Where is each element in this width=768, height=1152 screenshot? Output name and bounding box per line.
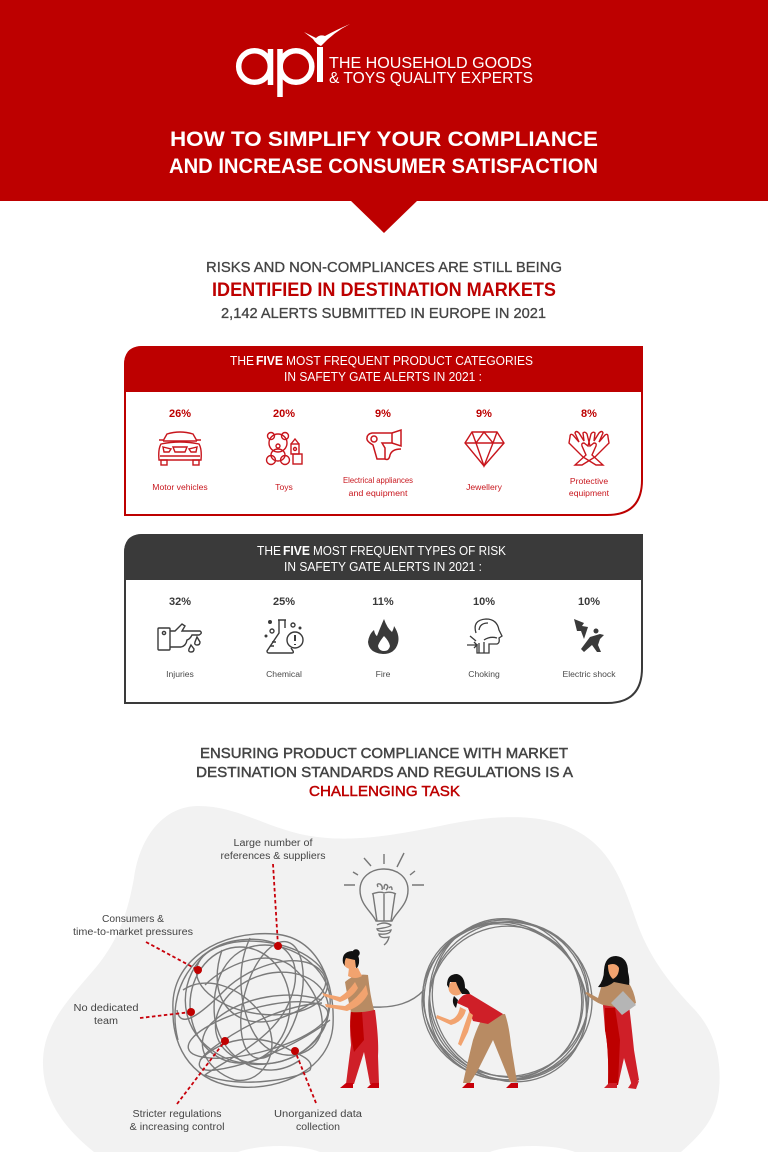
category labels: equipment (569, 488, 610, 498)
wire ring (394, 890, 619, 1114)
logo (239, 24, 533, 97)
panel heading: MOST FREQUENT PRODUCT CATEGORIES (286, 354, 533, 368)
callout labels: Stricter regulations (132, 1109, 222, 1120)
head (448, 980, 464, 996)
callout labels: Consumers & (102, 914, 164, 925)
icon: diamond (465, 432, 504, 466)
feet (604, 1081, 639, 1089)
percentages: 20% (273, 408, 295, 420)
category labels: Toys (275, 482, 293, 492)
risk labels: Electric shock (562, 669, 616, 679)
face (608, 964, 619, 979)
callout labels: references & suppliers (220, 851, 326, 862)
icon: light bulb (344, 853, 424, 945)
neck and head (348, 968, 362, 978)
icon: fire (368, 619, 398, 654)
feet (462, 1083, 518, 1088)
icon: car (159, 432, 201, 465)
icon: electric shock (574, 619, 604, 652)
torso (345, 975, 374, 1012)
percentages: 32% (169, 596, 191, 608)
arms (436, 1007, 473, 1046)
figure: woman with tablet (585, 956, 639, 1089)
tangled wires (173, 933, 424, 1087)
panel heading: IN SAFETY GATE ALERTS IN 2021 : (284, 560, 482, 574)
tablet (611, 991, 636, 1015)
panel heading: THE (230, 354, 254, 368)
category labels: Electrical appliances (343, 475, 413, 485)
shirt (457, 994, 503, 1024)
callout labels: Large number of (234, 838, 313, 849)
trousers (463, 1014, 517, 1083)
risk labels: Chemical (266, 669, 302, 679)
risk labels: Injuries (166, 669, 194, 679)
percentages: 8% (581, 408, 597, 420)
category labels: Protective (570, 476, 608, 486)
panel heading (230, 354, 533, 384)
feet (340, 1083, 379, 1088)
logo tagline: THE HOUSEHOLD GOODS (329, 55, 532, 72)
hair (343, 951, 359, 968)
percentages: 25% (273, 596, 295, 608)
category labels: and equipment (348, 488, 408, 498)
trousers (603, 1005, 639, 1086)
section heading: risks: IDENTIFIED IN DESTINATION MARKETS (212, 280, 556, 301)
icon: gloves (569, 432, 609, 465)
callout labels: No dedicated (74, 1003, 138, 1014)
panel heading: MOST FREQUENT TYPES OF RISK (313, 544, 507, 558)
legs (346, 1010, 379, 1084)
panel heading: IN SAFETY GATE ALERTS IN 2021 : (284, 370, 482, 384)
figure: woman inside ring (436, 974, 518, 1088)
category labels: Motor vehicles (152, 482, 208, 492)
section heading: risks: 2,142 ALERTS SUBMITTED IN EUROPE IN 2021 (221, 306, 546, 322)
callout labels: collection (296, 1122, 340, 1133)
percentages (169, 408, 597, 420)
title: HOW TO SIMPLIFY YOUR COMPLIANCE (170, 128, 598, 151)
category labels (152, 475, 610, 498)
figure: woman pulling tangle (322, 949, 379, 1088)
header banner (0, 0, 768, 233)
hair (447, 974, 470, 1008)
section heading: challenging task: ENSURING PRODUCT COMPLIANCE WITH MARKET (200, 746, 568, 762)
percentages: 9% (375, 408, 391, 420)
section heading: risks: RISKS AND NON-COMPLIANCES ARE STILL BEING (206, 260, 562, 276)
logo swoosh (304, 24, 350, 46)
callout labels: time-to-market pressures (73, 927, 193, 938)
panel heading: FIVE (283, 544, 310, 558)
percentages: 10% (473, 596, 495, 608)
section heading: risks (206, 260, 562, 322)
panel: risk types (124, 534, 643, 703)
logo wordmark api (239, 47, 320, 97)
risk labels (166, 669, 616, 679)
category labels: Jewellery (466, 482, 503, 492)
section heading: challenging task: DESTINATION STANDARDS AND REGULATIONS IS A (196, 765, 573, 781)
callout labels (73, 838, 362, 1133)
risk labels: Choking (468, 669, 500, 679)
callout labels: team (94, 1016, 118, 1027)
percentages: 11% (372, 596, 394, 608)
icon: injured hand (158, 624, 201, 652)
section heading: challenging task: CHALLENGING TASK (309, 784, 460, 800)
arms (322, 982, 368, 1011)
hair (598, 956, 629, 987)
panel heading: THE (257, 544, 281, 558)
percentages: 10% (578, 596, 600, 608)
risk labels: Fire (376, 669, 391, 679)
percentages: 26% (169, 408, 191, 420)
wire to ring (372, 990, 424, 1007)
logo tagline (329, 55, 533, 87)
logo tagline: & TOYS QUALITY EXPERTS (329, 70, 533, 87)
percentages: 9% (476, 408, 492, 420)
percentages (169, 596, 600, 608)
panel heading (257, 544, 507, 574)
icon: chemical flask (265, 620, 303, 653)
section heading: challenging task (196, 746, 573, 800)
title (169, 128, 598, 178)
panel: product categories (124, 346, 643, 515)
panel heading: FIVE (256, 354, 283, 368)
callout lines and dots (140, 864, 316, 1104)
illustration background blob (43, 806, 720, 1152)
top and arm (585, 979, 636, 1009)
callout labels: & increasing control (130, 1122, 224, 1133)
icon: choking head (467, 619, 502, 653)
callout labels: Unorganized data (274, 1109, 362, 1120)
title: AND INCREASE CONSUMER SATISFACTION (169, 155, 598, 178)
icon: hair dryer (367, 430, 401, 460)
icon: teddy and blocks (266, 432, 302, 464)
